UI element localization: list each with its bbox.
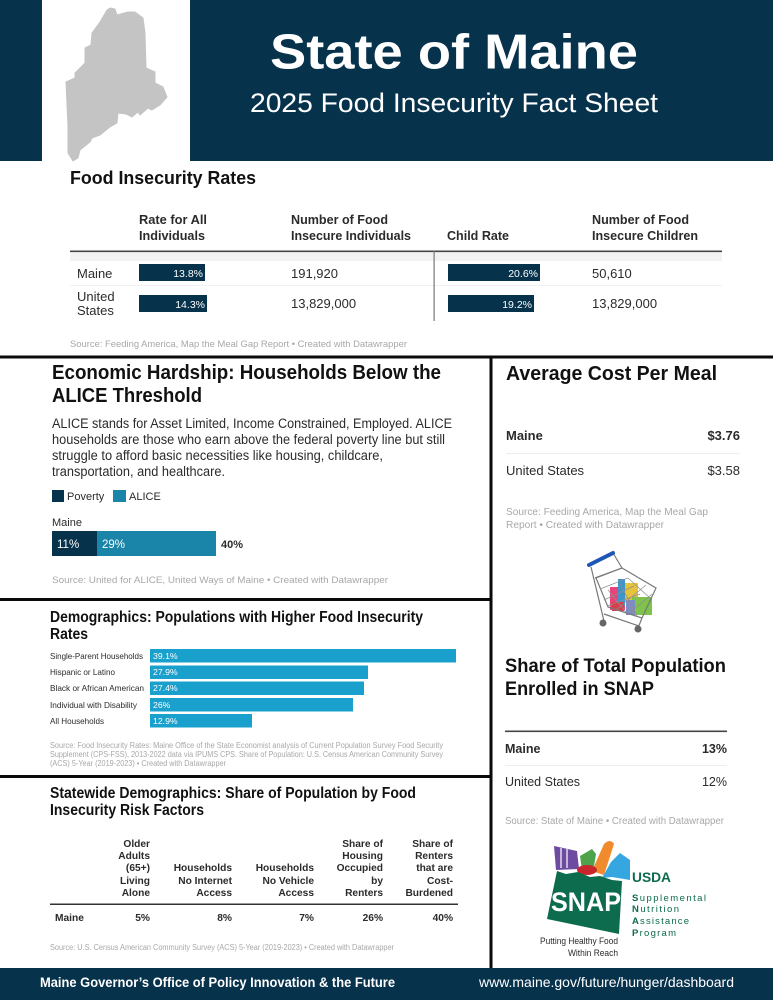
icon: shopping cart	[589, 553, 656, 632]
panel: statewide demographics: Insecurity Risk Factors	[50, 802, 204, 819]
stacked bar chart: Maine	[52, 517, 82, 529]
table: Households	[256, 863, 314, 874]
table: 40%	[433, 913, 453, 924]
row: United States: 14.3%	[175, 299, 205, 311]
description: ALICE stands for Asset Limited, Income Constrained, Employed. ALICE	[52, 416, 452, 431]
panel: economic hardship: ALICE Threshold	[52, 385, 202, 407]
table column headers: Insecure Children	[592, 228, 698, 243]
row: Maine: 20.6%	[508, 268, 538, 280]
source	[506, 507, 708, 531]
row: Maine: 50,610	[592, 266, 632, 281]
heading: Share of Total Population	[505, 655, 726, 677]
heading: Average Cost Per Meal	[506, 363, 717, 385]
table column headers: Rate for All	[139, 212, 207, 227]
bar chart: 39.1%	[153, 651, 178, 661]
table: Access	[196, 888, 232, 899]
footer	[0, 968, 773, 1000]
table: 8%	[217, 913, 232, 924]
bar chart: All Households	[50, 716, 105, 726]
bar chart: 27.9%	[153, 667, 178, 677]
table: Maine	[505, 742, 540, 756]
table: Adults	[118, 851, 150, 862]
row: Maine: 191,920	[291, 266, 338, 281]
table: Share of	[342, 839, 384, 850]
table: 12%	[702, 775, 727, 789]
table: United States	[506, 463, 585, 478]
source: Report • Created with Datawrapper	[506, 520, 665, 531]
panel: statewide demographics	[50, 785, 458, 952]
table: $3.76	[707, 428, 740, 443]
row: Maine: 13.8%	[173, 268, 203, 280]
table: Share of	[412, 839, 454, 850]
table	[50, 839, 458, 924]
table	[505, 742, 727, 789]
SNAP logo: Within Reach	[568, 948, 618, 958]
table: Alone	[122, 888, 150, 899]
row: United States: 19.2%	[502, 299, 532, 311]
SNAP logo: USDA	[632, 869, 671, 885]
footer: Maine Governor’s Office of Policy Innovation & the Future	[40, 975, 395, 990]
heading: Economic Hardship: Households Below the	[52, 362, 441, 384]
table column headers: Individuals	[139, 228, 205, 243]
SNAP logo	[540, 841, 706, 958]
table: No Vehicle	[262, 876, 314, 887]
source: Source: State of Maine • Created with Datawrapper	[505, 816, 725, 827]
panel: economic hardship	[52, 362, 452, 586]
legend: ALICE	[129, 491, 161, 503]
SNAP logo: Supplemental	[632, 893, 706, 904]
row: Maine: Maine	[77, 266, 112, 281]
bar chart: Black or African American	[50, 683, 144, 693]
description	[52, 416, 452, 479]
bar chart: Individual with Disability	[50, 700, 138, 710]
stacked bar chart: 11%	[57, 539, 79, 551]
panel: demographics	[50, 609, 456, 768]
table: No Internet	[178, 876, 233, 887]
source: Source: Food Insecurity Rates: Maine Office of the State Economist analysis of Current Population Survey Food Security	[50, 741, 443, 750]
icon: map of Maine	[66, 8, 167, 161]
table: that are	[416, 863, 453, 874]
table: $3.58	[707, 463, 740, 478]
legend	[52, 490, 161, 503]
row: United States	[77, 289, 657, 318]
table: Burdened	[405, 888, 453, 899]
table column headers: Insecure Individuals	[291, 228, 411, 243]
SNAP logo: Putting Healthy Food	[540, 936, 618, 946]
source	[50, 741, 443, 768]
stacked bar chart: 40%	[221, 539, 243, 551]
source: Source: U.S. Census American Community Survey (ACS) 5-Year (2019-2023) • Created with Datawrapper	[50, 943, 394, 952]
heading: Demographics: Populations with Higher Food Insecurity	[50, 609, 423, 626]
table column headers: Number of Food	[291, 212, 388, 227]
row: United States: States	[77, 303, 114, 318]
SNAP logo: Program	[632, 928, 676, 939]
table: 26%	[363, 913, 383, 924]
bar chart: Single-Parent Households	[50, 651, 144, 661]
table: Cost-	[427, 876, 453, 887]
panel: SNAP share	[505, 655, 727, 827]
table: Living	[120, 876, 150, 887]
source: Source: Feeding America, Map the Meal Gap Report • Created with Datawrapper	[70, 339, 407, 350]
table: Maine	[55, 913, 84, 924]
table column headers	[139, 212, 698, 243]
description: transportation, and healthcare.	[52, 464, 225, 479]
description: struggle to afford basic necessities like housing, childcare,	[52, 448, 383, 463]
header banner	[0, 0, 773, 161]
table: (65+)	[126, 863, 150, 874]
bar chart: 27.4%	[153, 683, 178, 693]
table column headers: Number of Food	[592, 212, 689, 227]
table: Renters	[415, 851, 453, 862]
row: United States: 13,829,000	[291, 296, 356, 311]
table: Housing	[342, 851, 383, 862]
stacked bar chart	[52, 517, 243, 556]
source: Source: Feeding America, Map the Meal Gap	[506, 507, 708, 518]
table: 13%	[702, 742, 727, 756]
table: Occupied	[337, 863, 383, 874]
row: United States: 13,829,000	[592, 296, 657, 311]
panel: SNAP share: Enrolled in SNAP	[505, 678, 654, 700]
table: by	[371, 876, 383, 887]
source: (ACS) 5-Year (2019-2023) • Created with Datawrapper	[50, 759, 226, 768]
bar chart: 26%	[153, 700, 171, 710]
source: Source: United for ALICE, United Ways of Maine • Created with Datawrapper	[52, 575, 388, 586]
table: Households	[174, 863, 232, 874]
legend: Poverty	[67, 491, 105, 503]
SNAP logo: Assistance	[632, 916, 689, 927]
panel: food insecurity rates	[70, 167, 722, 350]
SNAP logo: Nutrition	[632, 904, 679, 915]
bar chart: 12.9%	[153, 716, 178, 726]
bar chart: Hispanic or Latino	[50, 667, 115, 677]
table: 7%	[299, 913, 314, 924]
heading: Statewide Demographics: Share of Population by Food	[50, 785, 416, 802]
panel: average cost per meal	[506, 363, 740, 531]
subtitle: 2025 Food Insecurity Fact Sheet	[250, 88, 659, 118]
stacked bar chart: 29%	[102, 539, 125, 551]
description: households are those who earn above the federal poverty line but still	[52, 432, 445, 447]
table: Maine	[506, 428, 543, 443]
bar chart	[50, 649, 456, 728]
row: Maine	[77, 264, 632, 281]
table: Access	[278, 888, 314, 899]
table: Older	[123, 839, 150, 850]
source: Supplement (CPS-FSS), 2013-2022 data via IPUMS CPS. Share of Population: U.S. Census American Community Survey	[50, 750, 443, 759]
table: Renters	[345, 888, 383, 899]
footer: www.maine.gov/future/hunger/dashboard	[478, 974, 734, 990]
panel: demographics: Rates	[50, 626, 88, 643]
title: State of Maine	[270, 26, 638, 80]
table: 5%	[135, 913, 150, 924]
table: United States	[505, 775, 580, 789]
table	[506, 428, 740, 478]
row: United States: United	[77, 289, 115, 304]
heading: Food Insecurity Rates	[70, 167, 256, 188]
SNAP logo: SNAP	[551, 887, 621, 917]
table column headers: Child Rate	[447, 228, 509, 243]
